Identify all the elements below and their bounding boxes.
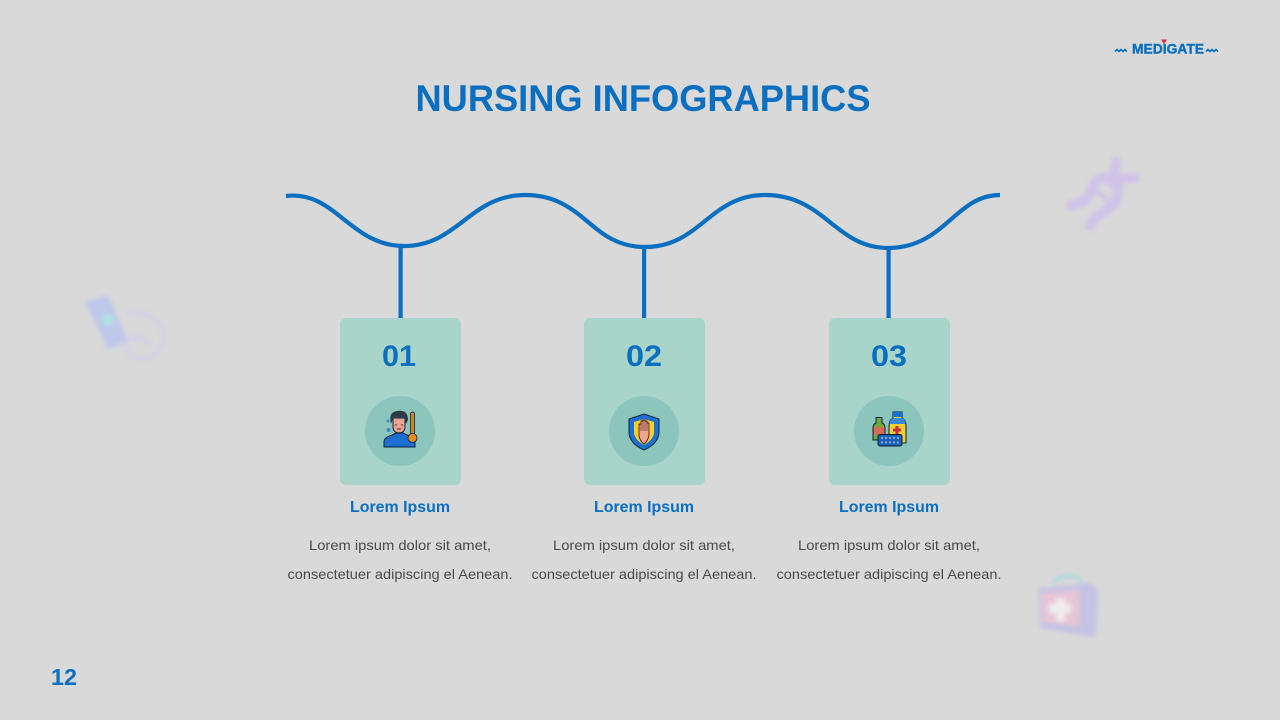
title: NURSING INFOGRAPHICS xyxy=(416,78,870,119)
icon: first aid kit xyxy=(1039,576,1098,637)
card 2 xyxy=(532,247,756,582)
icon: person with fever xyxy=(365,396,435,466)
card background 2 xyxy=(584,318,705,485)
card background 3 xyxy=(829,318,950,485)
icon: shield with hand xyxy=(609,396,679,466)
number 03: 03 xyxy=(871,340,907,373)
heading 1: Lorem Ipsum xyxy=(350,499,450,516)
icon: phone with charging cable xyxy=(85,295,163,359)
description 3: Lorem ipsum dolor sit amet, xyxy=(798,537,980,553)
logo: Medigate: MEDIGATE xyxy=(1132,40,1204,56)
card 1 xyxy=(288,246,512,582)
icon: DNA helix xyxy=(1071,162,1135,226)
wave connector xyxy=(286,195,1000,248)
description 2 xyxy=(532,537,756,582)
card 3 xyxy=(776,248,1002,582)
heading 2: Lorem Ipsum xyxy=(594,499,694,516)
description 3: consectetuer adipiscing el Aenean. xyxy=(776,566,1002,582)
description 1: Lorem ipsum dolor sit amet, xyxy=(309,537,491,553)
description 2: Lorem ipsum dolor sit amet, xyxy=(553,537,735,553)
card background 1 xyxy=(340,318,461,485)
connector 3 xyxy=(886,248,891,319)
description 1: consectetuer adipiscing el Aenean. xyxy=(288,566,512,582)
description 3 xyxy=(776,537,1002,582)
logo: Medigate xyxy=(1115,40,1218,56)
number 02: 02 xyxy=(626,340,662,373)
icon: medicine bottles xyxy=(854,396,924,466)
description 1 xyxy=(288,537,512,582)
number 01: 01 xyxy=(382,340,416,373)
heading 3: Lorem Ipsum xyxy=(839,499,939,516)
description 2: consectetuer adipiscing el Aenean. xyxy=(532,566,756,582)
connector 1 xyxy=(398,246,403,319)
connector 2 xyxy=(642,247,646,319)
page number: 12 xyxy=(51,664,77,690)
